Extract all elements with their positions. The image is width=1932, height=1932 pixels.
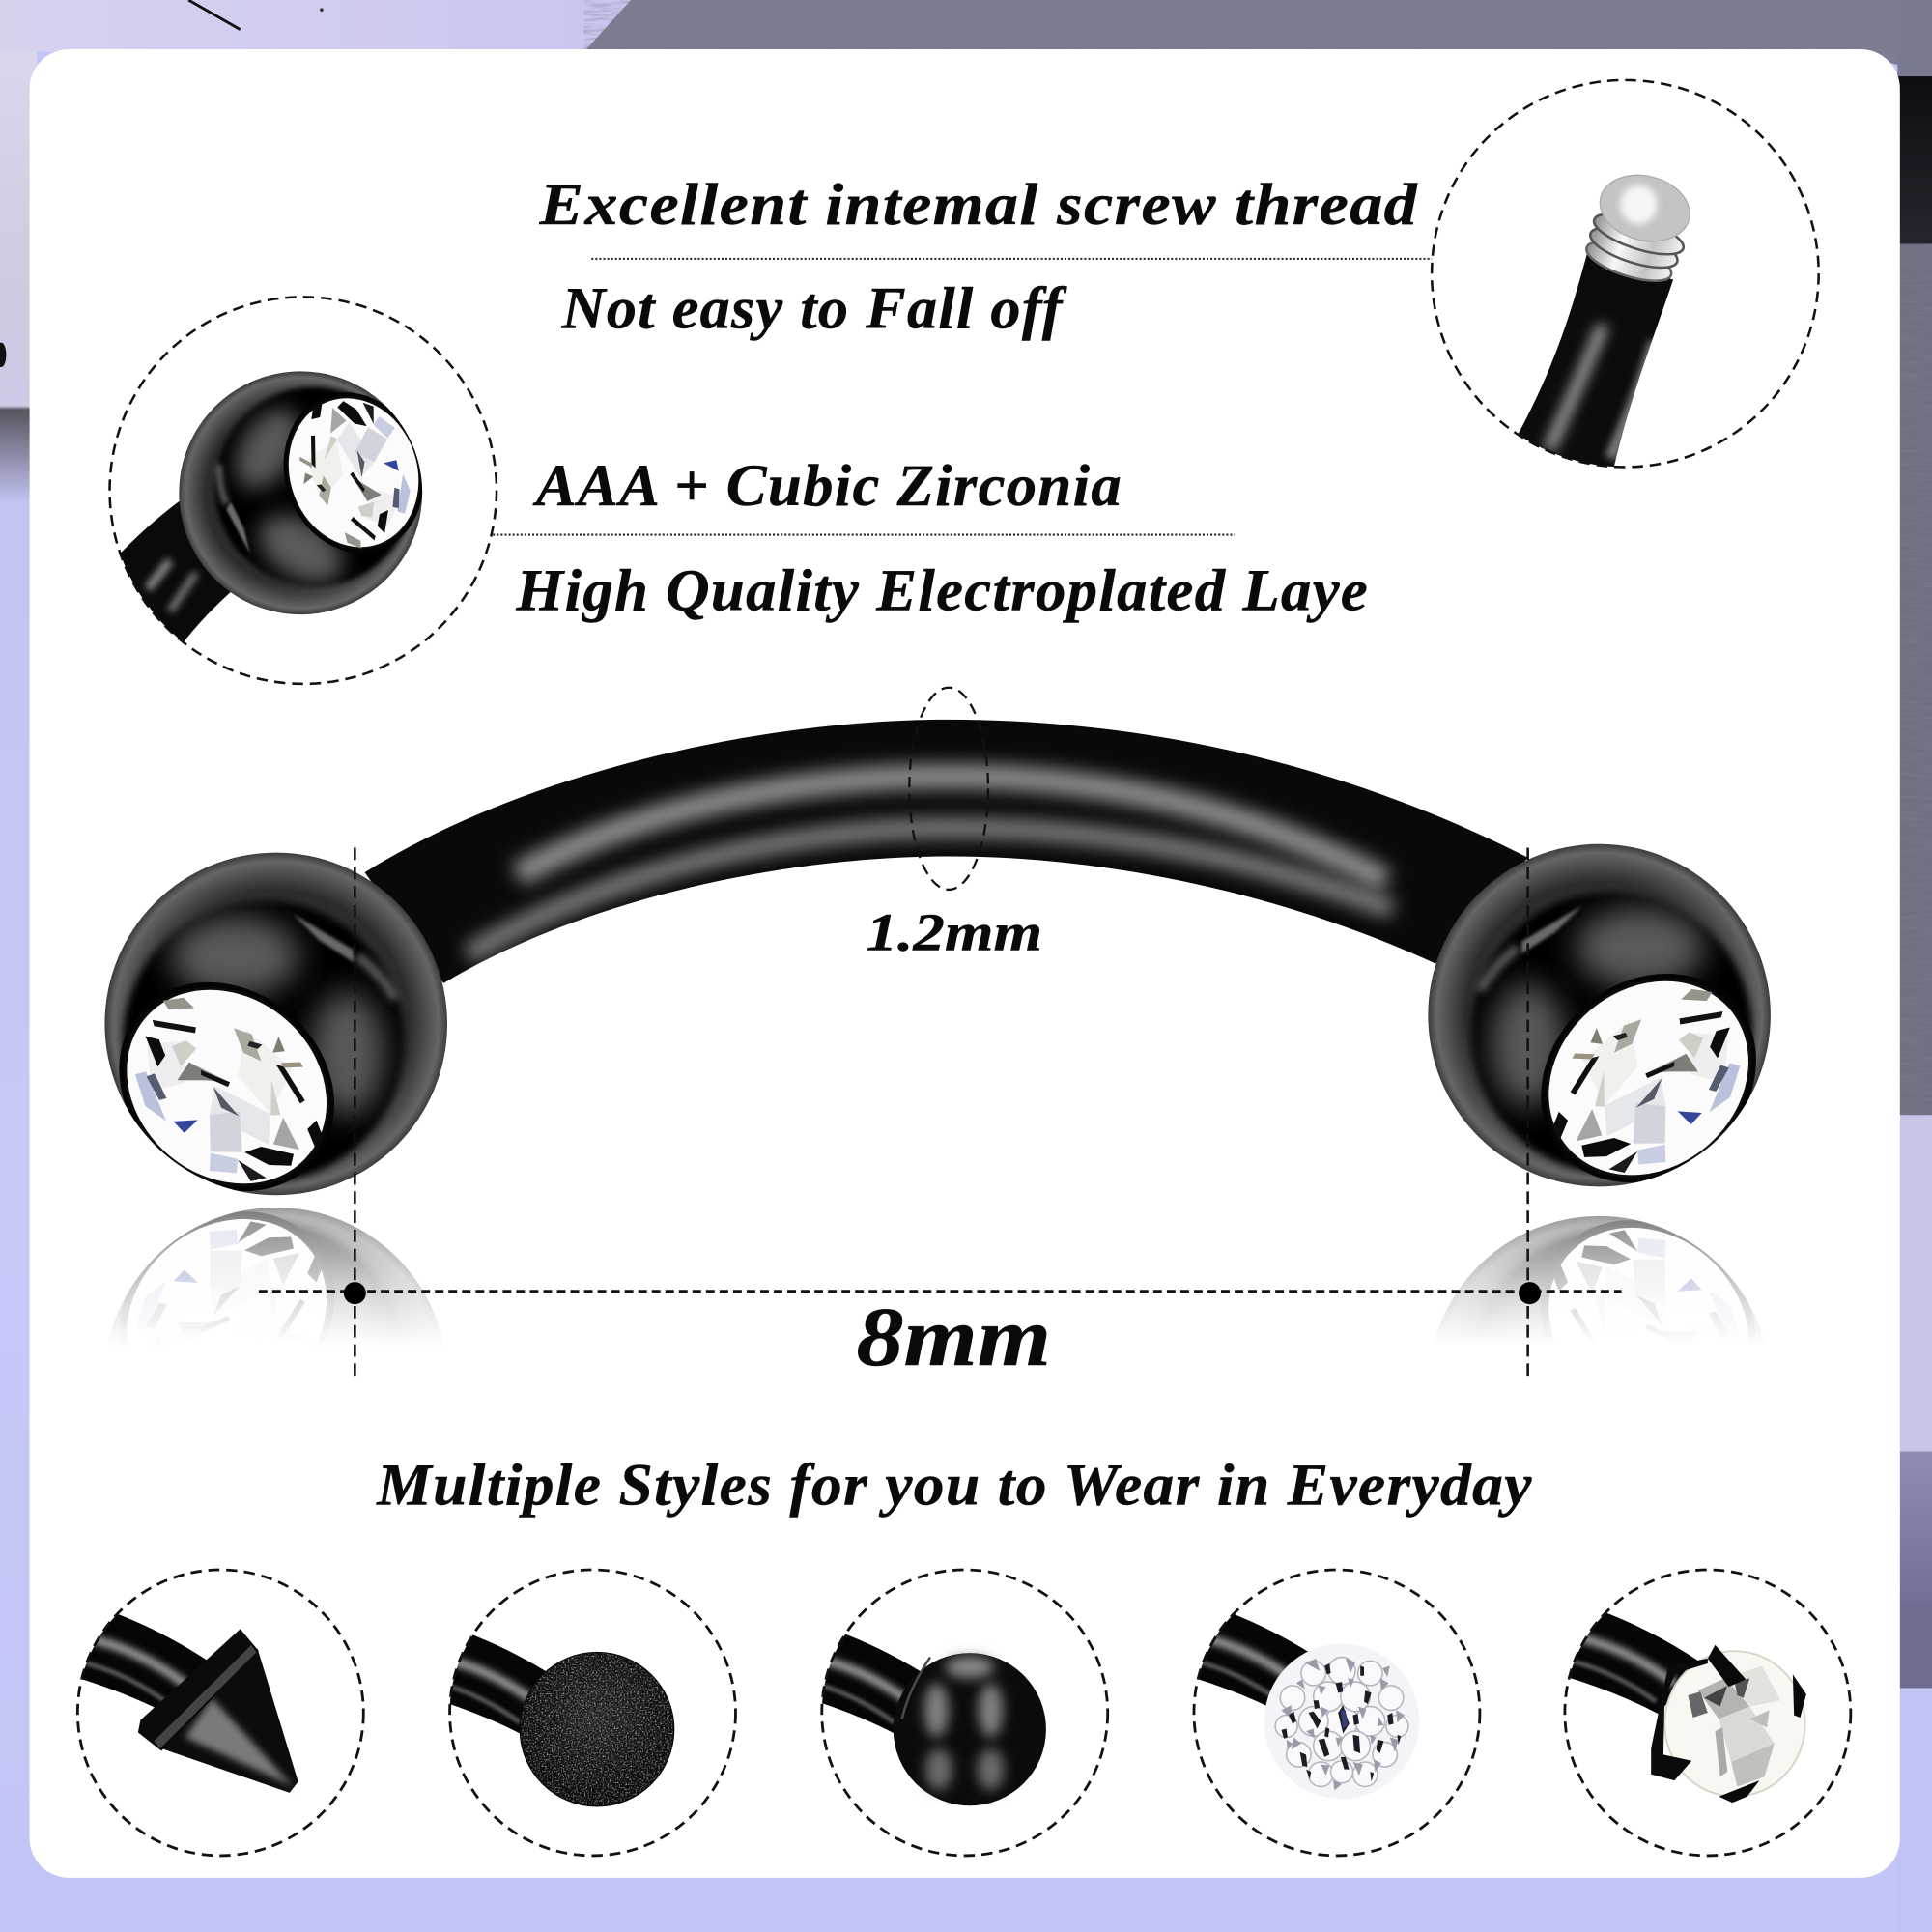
silver thread tip bbox=[1582, 166, 1697, 289]
style: spike bbox=[62, 1570, 363, 1856]
inset: internal screw thread bbox=[1432, 80, 1819, 483]
style: crystal pave ball bbox=[1175, 1570, 1480, 1856]
dashed circle bbox=[1432, 80, 1819, 467]
sandblasted ball bbox=[520, 1652, 674, 1807]
tube bbox=[450, 1634, 546, 1733]
tube bbox=[83, 1614, 207, 1708]
spike cone bbox=[138, 1629, 298, 1793]
dashed circle bbox=[822, 1570, 1108, 1856]
main barbell reflections bbox=[28, 1120, 1848, 1559]
left jewelled ball bbox=[28, 853, 447, 1283]
screw tube bbox=[1519, 254, 1673, 468]
text: cubic zirconia: AAA + Cubic Zirconia bbox=[532, 453, 1122, 519]
style: prong-set gem bbox=[1550, 1570, 1851, 1856]
text: electroplated layer: High Quality Electroplated Laye bbox=[515, 557, 1369, 623]
style: matte ball bbox=[414, 1570, 735, 1856]
inset: cubic zirconia ball bbox=[108, 296, 498, 686]
8mm dimension lines bbox=[259, 848, 1622, 1381]
text: not easy to fall off: Not easy to Fall off bbox=[561, 275, 1067, 341]
tube bbox=[1199, 1614, 1308, 1706]
right jewelled ball bbox=[1428, 844, 1848, 1274]
tube bbox=[1571, 1613, 1698, 1714]
tube stub bbox=[122, 500, 231, 641]
callout line: screw thread bbox=[591, 258, 1432, 260]
dashed circle bbox=[1194, 1570, 1480, 1856]
label: 8mm: 8mm bbox=[856, 1291, 1051, 1383]
dashed circle bbox=[77, 1570, 363, 1856]
tube bbox=[822, 1634, 920, 1733]
callout line: zirconia bbox=[493, 534, 1235, 536]
jewelled ball bbox=[133, 272, 547, 688]
curved bar bbox=[365, 720, 1528, 983]
heading: multiple styles: Multiple Styles for you to Wear in Everyday bbox=[376, 1452, 1533, 1518]
main curved barbell bbox=[28, 720, 1848, 1283]
dashed circle bbox=[110, 297, 497, 684]
prong setting and gem bbox=[1651, 1645, 1806, 1803]
style: glossy ball bbox=[788, 1570, 1108, 1856]
bar diameter ellipse bbox=[909, 688, 988, 890]
label: 1.2mm: 1.2mm bbox=[867, 902, 1042, 961]
dashed circle bbox=[450, 1570, 735, 1856]
glossy ball bbox=[894, 1653, 1046, 1805]
crystal ball bbox=[1264, 1644, 1419, 1799]
dashed circle bbox=[1565, 1570, 1851, 1856]
text: excellent thread: Excellent intemal screw thread bbox=[539, 172, 1418, 238]
